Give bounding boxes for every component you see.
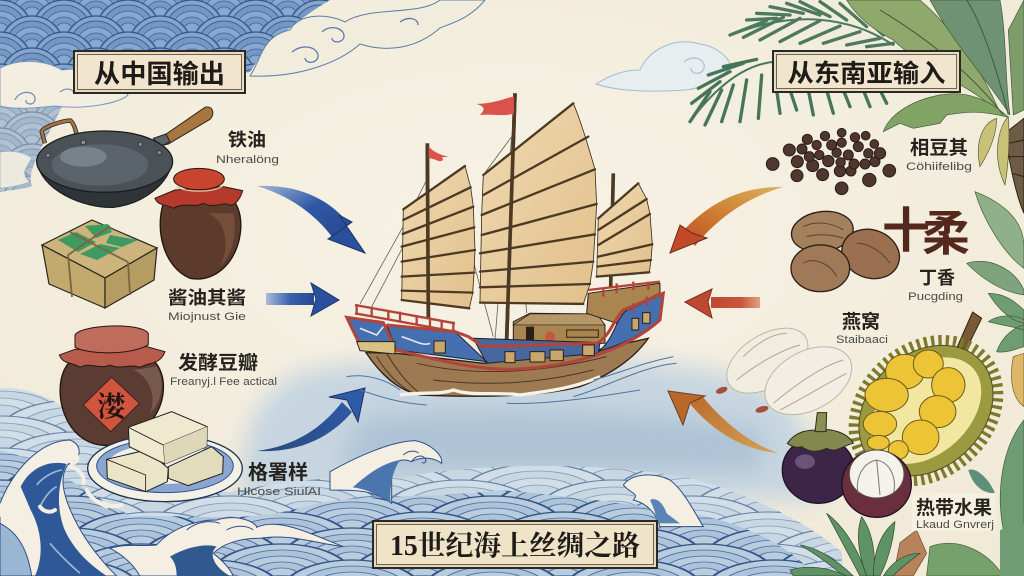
wave: centre curl (330, 441, 442, 503)
ship: windows (434, 313, 650, 363)
label: tropical fruit: Lkaud Gnvrerj (916, 519, 994, 531)
banner: from Southeast Asia (772, 50, 961, 93)
label: clove: 丁香 (919, 268, 955, 288)
wave: large curl left (0, 440, 122, 576)
label: tofu: Hlcose SiuſAI (237, 486, 321, 498)
banner: from Southeast Asia: 从东南亚输入 (788, 60, 946, 88)
item: nutmegs (789, 208, 906, 292)
label: tropical fruit: 热带水果 (916, 497, 992, 519)
arrow: Southeast Asia to ship, top (670, 187, 783, 253)
label: soy sauce (168, 288, 246, 323)
item: fermented bean jar: 漤 (97, 391, 127, 423)
ship: masts and rigging (360, 93, 613, 340)
label: clove: Pucgding (908, 291, 963, 303)
item: bird's nests (715, 315, 863, 428)
item: peppercorns (766, 128, 896, 195)
label: soy sauce: 酱油其酱 (168, 288, 246, 308)
palm and tropical foliage, top right (690, 0, 1024, 295)
ship: flags (429, 97, 514, 161)
arrow: Southeast Asia to ship, middle (685, 289, 760, 318)
arrow: China to ship, top (257, 186, 365, 253)
arrow: Southeast Asia to ship, bottom (668, 391, 778, 453)
ship: painted blue hull bands (347, 293, 663, 363)
label: iron wok (216, 130, 279, 166)
ship: cabin (513, 313, 605, 345)
label: tropical fruit (912, 493, 996, 531)
foliage: bottom right plants (790, 420, 1024, 576)
label: fermented bean paste (170, 351, 277, 388)
wave: second curl bottom left (110, 518, 343, 576)
title banner (372, 520, 658, 569)
label: fermented bean paste: Freanyj.l Fee actical (170, 376, 277, 388)
ship: hull (366, 338, 648, 396)
label: clove (908, 268, 963, 303)
ship: sails (402, 103, 652, 308)
label: bird's nest (836, 310, 888, 346)
label: pepper (906, 137, 972, 173)
label: iron wok: Nheralöng (216, 154, 279, 166)
ship: sail battens (402, 103, 652, 308)
item: mangosteens (782, 413, 911, 517)
ship: aft deck (587, 283, 660, 323)
label: pepper: Cöhiifelibg (906, 161, 972, 173)
cloud: upper right of ship (596, 42, 731, 91)
item: durian (825, 311, 1024, 510)
ship: foam (400, 377, 600, 395)
ship: railings (355, 282, 660, 332)
banner: from China: 从中国输出 (94, 59, 225, 89)
label: iron wok: 铁油 (228, 130, 266, 150)
palm: trunk and dry fronds (1005, 118, 1024, 213)
label: fermented bean paste: 发酵豆瓣 (178, 351, 258, 374)
palm: side leaves (975, 192, 1024, 268)
item: clove characters: 柔 (922, 208, 970, 261)
wave: right curl (623, 475, 703, 527)
label: soy sauce: Miojnust Gie (168, 311, 246, 323)
palm: upper frond (730, 2, 893, 47)
arrow: China to ship, bottom (257, 388, 365, 451)
item: clove characters (882, 205, 970, 261)
arrow: China to ship, middle (266, 283, 339, 316)
foliage: right edge leaves and fruit (988, 293, 1024, 407)
sea: layered waves (0, 357, 842, 576)
label: pepper: 相豆其 (910, 137, 968, 159)
junk ship (347, 93, 677, 405)
label: bird's nest: 燕窝 (842, 310, 880, 333)
background: patterned waves and clouds, top left (0, 0, 485, 192)
palm: lower frond (690, 59, 887, 125)
label: bird's nest: Staibaaci (836, 334, 888, 346)
label: tofu (237, 461, 321, 498)
item: brown jar with red cloth (155, 168, 243, 279)
item: tofu on blue plate (88, 412, 242, 502)
palm: broad leaves (847, 0, 1000, 113)
banner: from China (73, 50, 246, 94)
title banner: 15世纪海上丝绸之路 (390, 530, 640, 562)
item: clove characters: 十 (882, 205, 930, 258)
item: wok (37, 107, 213, 207)
label: tofu: 格署样 (248, 461, 308, 484)
item: fermented bean jar (59, 326, 165, 445)
item: tea package (42, 220, 157, 308)
